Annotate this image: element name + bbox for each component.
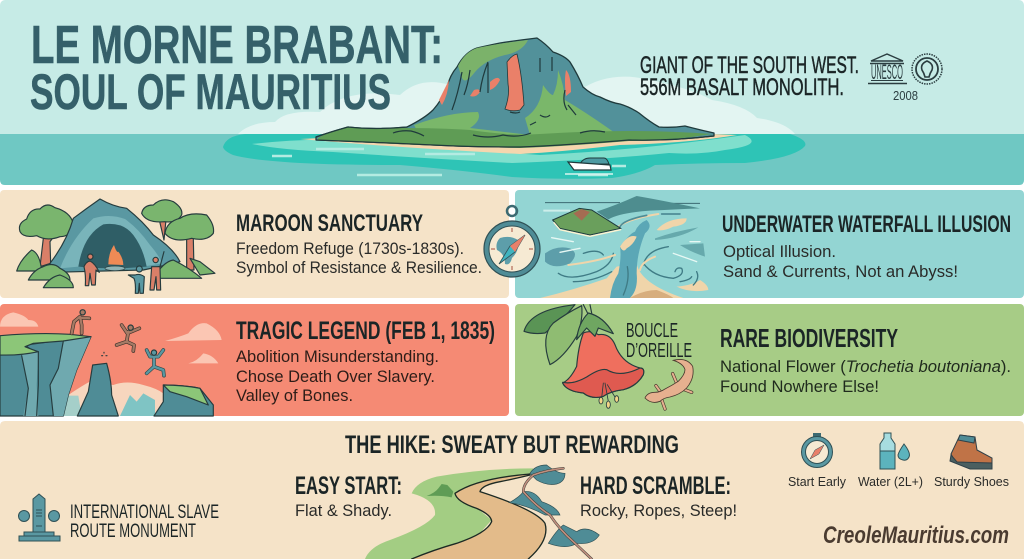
tips labels: Start Early	[788, 474, 846, 489]
tips labels: Sturdy Shoes	[934, 474, 1009, 489]
icon: boucle d'oreille flower	[524, 305, 644, 408]
panel: underwater waterfall illusion	[515, 190, 1024, 298]
icon: hiking path	[365, 465, 599, 559]
panel: hero header: UNESCO	[871, 61, 903, 84]
panel: maroon sanctuary	[0, 190, 509, 298]
body text: Abolition Misunderstanding.	[236, 347, 439, 366]
icon: UNESCO temple	[868, 54, 907, 84]
body text: Found Nowhere Else!	[720, 377, 879, 396]
panel: tragic legend	[0, 304, 509, 416]
monument label: ROUTE MONUMENT	[70, 521, 196, 542]
icon: cave with trees and people	[17, 199, 215, 293]
heading: TRAGIC LEGEND (FEB 1, 1835)	[236, 317, 495, 345]
year label: 2008	[893, 88, 918, 103]
panel: the hike	[0, 421, 1024, 559]
icon: stopwatch	[802, 433, 832, 468]
icon: gecko	[645, 359, 693, 409]
subtitle	[640, 52, 859, 101]
easy start: Flat & Shady.	[295, 501, 392, 520]
flower label: D’OREILLE	[626, 340, 692, 362]
tips labels: Water (2L+)	[858, 474, 923, 489]
heading: THE HIKE: SWEATY BUT REWARDING	[345, 431, 679, 459]
flower label: BOUCLE	[626, 320, 678, 342]
icon: boot	[950, 435, 992, 469]
title	[30, 15, 443, 120]
lagoon	[223, 134, 805, 179]
illustration: waterfall and island	[540, 196, 708, 298]
hard scramble	[580, 472, 737, 520]
body text: Sand & Currents, Not an Abyss!	[723, 262, 958, 281]
body text	[720, 357, 1011, 396]
body text: National Flower (Trochetia boutoniana).	[720, 357, 1011, 376]
clouds	[238, 77, 795, 134]
illustration: cliffs and falling figures	[0, 310, 222, 416]
easy start: EASY START:	[295, 472, 402, 500]
heading: MAROON SANCTUARY	[236, 210, 423, 237]
monument label: INTERNATIONAL SLAVE	[70, 502, 219, 523]
icon: compass	[484, 206, 540, 277]
subtitle: GIANT OF THE SOUTH WEST.	[640, 52, 859, 79]
hard scramble: HARD SCRAMBLE:	[580, 472, 731, 500]
panel: rare biodiversity	[515, 304, 1024, 416]
subtitle: 556M BASALT MONOLITH.	[640, 74, 844, 101]
monument label	[70, 502, 219, 542]
title: SOUL OF MAURITIUS	[30, 64, 391, 120]
panel: hero header	[0, 0, 1024, 185]
body text: Valley of Bones.	[236, 386, 353, 405]
icon: water bottle	[880, 433, 909, 469]
icon: Le Morne mountain	[300, 38, 737, 154]
body text: Chose Death Over Slavery.	[236, 367, 435, 386]
body text: Symbol of Resistance & Resilience.	[236, 258, 482, 277]
body text	[723, 242, 958, 281]
body text	[236, 239, 482, 277]
icon: world heritage emblem	[912, 54, 942, 84]
easy start	[295, 472, 402, 520]
hard scramble: Rocky, Ropes, Steep!	[580, 501, 737, 520]
body text	[236, 347, 439, 405]
heading: RARE BIODIVERSITY	[720, 323, 898, 353]
body text: Optical Illusion.	[723, 242, 836, 261]
title: LE MORNE BRABANT:	[31, 15, 443, 75]
sea	[0, 134, 1024, 185]
icon: boat	[565, 158, 613, 174]
tips labels	[788, 474, 1009, 489]
icon: monument	[18, 494, 60, 541]
flower label	[626, 320, 692, 362]
body text: Freedom Refuge (1730s-1830s).	[236, 239, 464, 258]
